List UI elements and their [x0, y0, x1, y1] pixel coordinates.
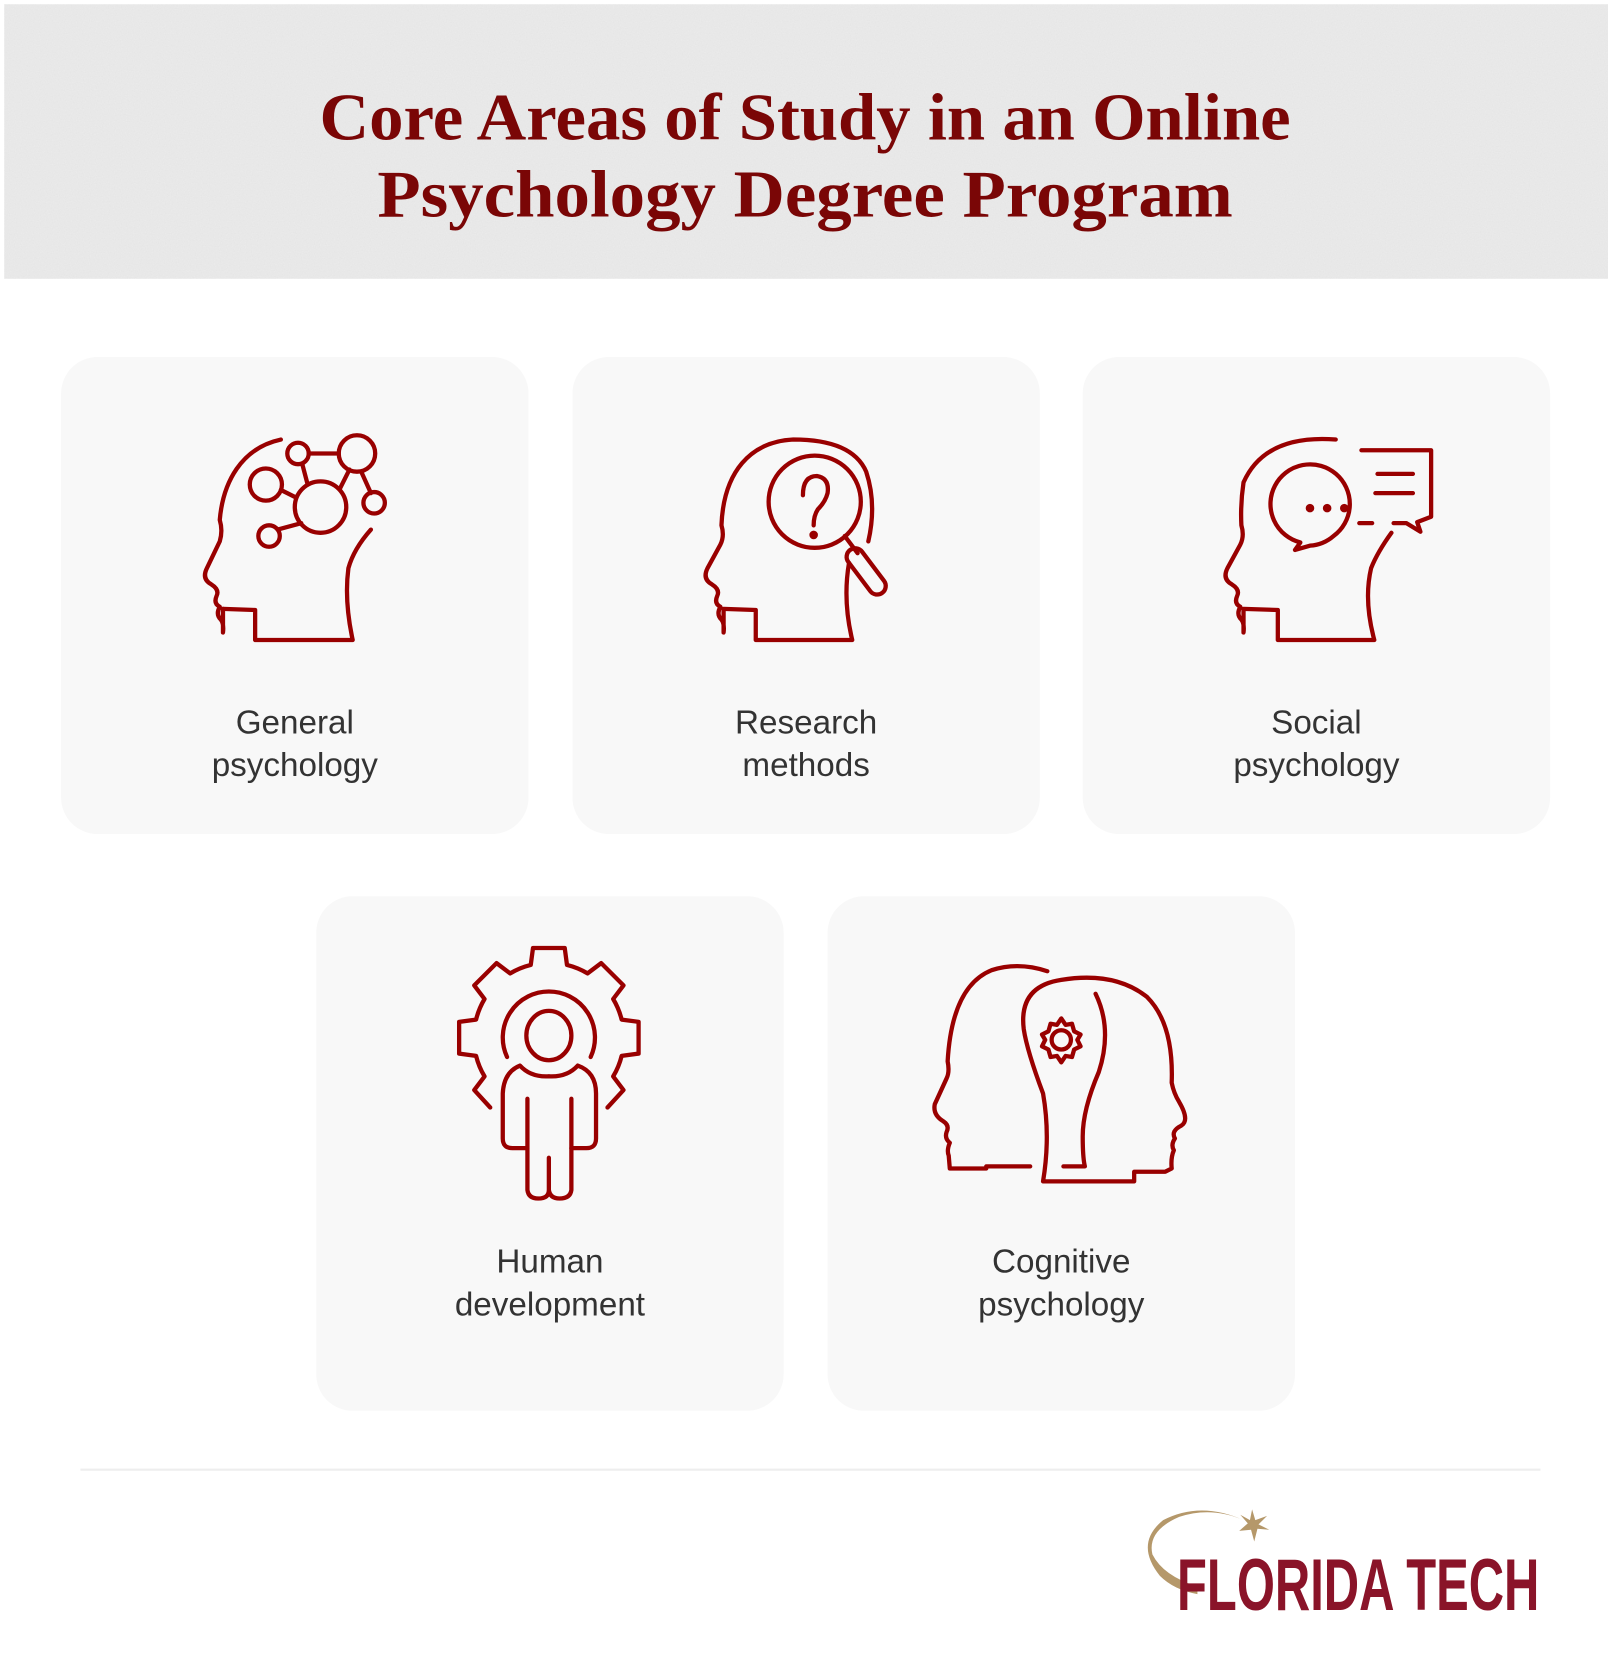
card: human development — [316, 896, 784, 1411]
label: psychology — [212, 747, 378, 784]
label: General — [236, 704, 354, 741]
icon: two heads with gear — [934, 966, 1185, 1181]
label: development — [455, 1286, 645, 1323]
logo: Florida Tech — [1148, 1509, 1539, 1626]
label — [978, 1243, 1145, 1323]
card: research methods — [572, 357, 1040, 834]
label: methods — [742, 747, 870, 784]
title: Psychology Degree Program — [377, 159, 1233, 232]
label: Research — [735, 704, 877, 741]
label: psychology — [1233, 747, 1400, 784]
title — [319, 81, 1291, 232]
card: cognitive psychology — [828, 896, 1295, 1411]
icon: head with network — [205, 435, 385, 640]
label — [735, 704, 877, 784]
label — [212, 704, 378, 784]
icon: head with speech bubbles — [1226, 439, 1431, 640]
title: Core Areas of Study in an Online — [319, 81, 1291, 154]
label — [455, 1243, 645, 1323]
icon: person in gear — [459, 948, 639, 1199]
header banner — [4, 4, 1608, 279]
card: general psychology — [61, 357, 528, 834]
label: Social — [1271, 704, 1362, 741]
label — [1233, 704, 1400, 784]
icon: head with magnifier — [706, 440, 889, 640]
label: Cognitive — [992, 1243, 1131, 1280]
card: social psychology — [1083, 357, 1550, 834]
label: Human — [496, 1243, 603, 1280]
label: psychology — [978, 1286, 1145, 1323]
